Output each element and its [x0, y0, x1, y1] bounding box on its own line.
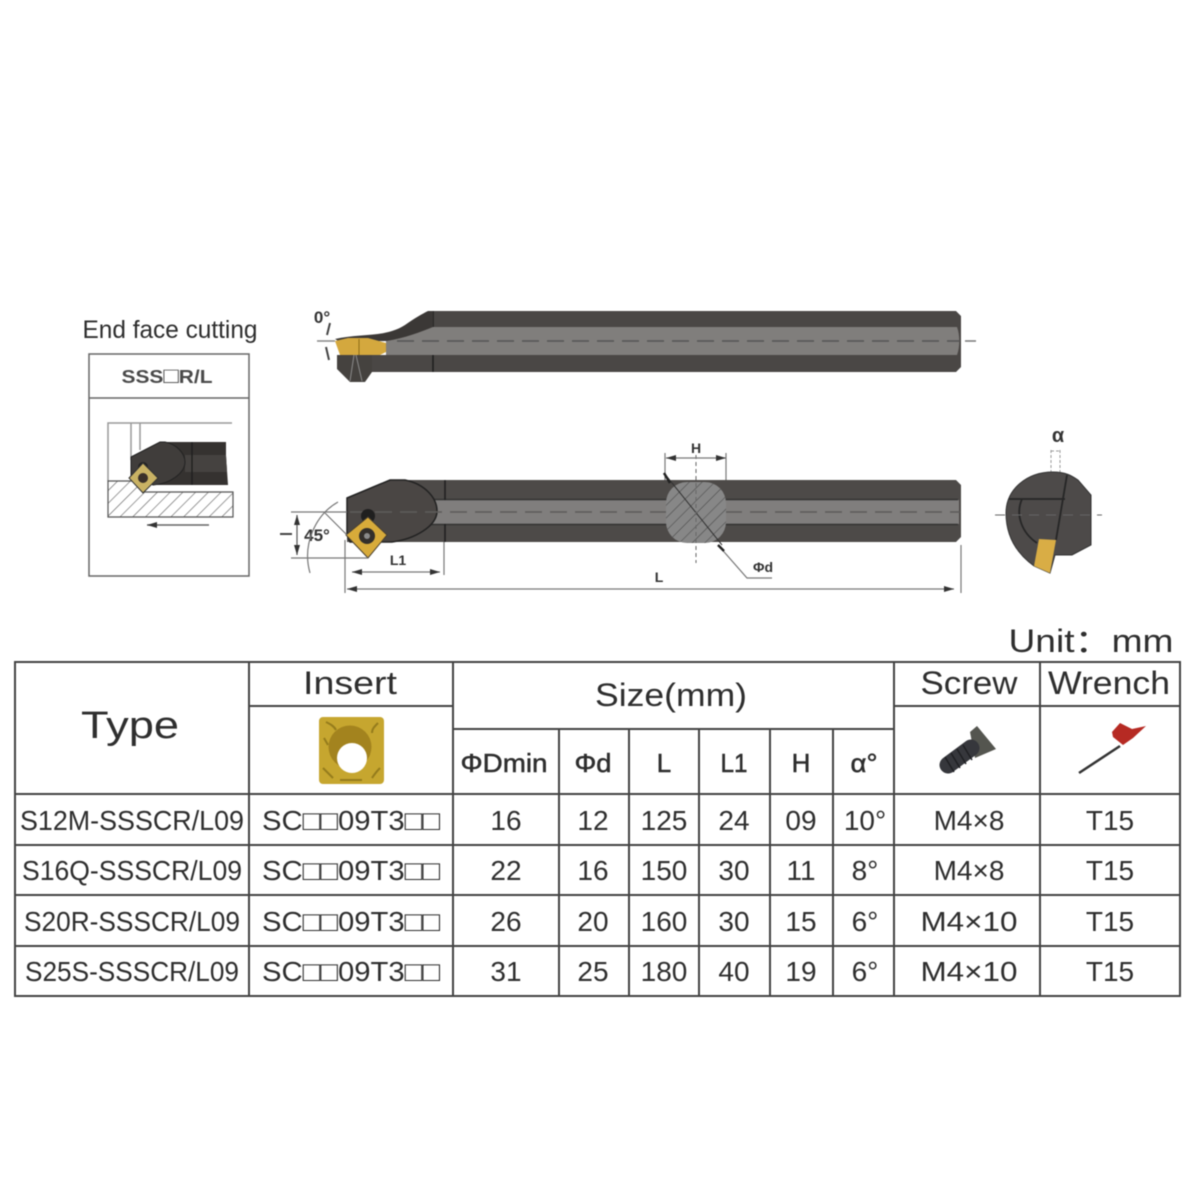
alpha label: α: [1052, 425, 1065, 447]
dimension L: [345, 540, 961, 593]
row S12M: SC□□09T3□□: [262, 805, 440, 836]
row S25S: S25S-SSSCR/L09: [25, 956, 239, 987]
angle 45 degrees: 45°: [304, 526, 330, 545]
shank divider: [444, 480, 446, 542]
body: [1006, 472, 1091, 573]
head: [347, 480, 437, 542]
center line: [350, 511, 960, 513]
row S12M: 24: [718, 805, 750, 836]
workpiece hatch: [108, 481, 233, 517]
row S20R: SC□□09T3□□: [262, 906, 440, 937]
end view drawing: [995, 425, 1102, 573]
icon: screw: [945, 726, 996, 772]
header row: [81, 665, 1170, 778]
dimension phi d: [664, 473, 773, 578]
box label: SSS □R/L: [122, 363, 212, 388]
row S20R: M4×10: [920, 906, 1018, 937]
header row: Size(mm): [595, 677, 747, 713]
row S25S: 40: [718, 956, 750, 987]
row S12M: M4×8: [934, 805, 1004, 836]
box frame: [89, 354, 249, 576]
tool side view: [131, 442, 228, 485]
center line end: [995, 514, 1102, 516]
feed arrow: [147, 524, 209, 526]
top tool drawing: [314, 308, 976, 382]
row S12M: 125: [641, 805, 687, 836]
main tool drawing: [280, 440, 961, 593]
section hatch: [664, 455, 726, 563]
header row: Φd: [574, 748, 612, 778]
head lower: [337, 355, 372, 382]
row S25S: M4×10: [920, 956, 1018, 987]
row S16Q: 22: [490, 855, 522, 886]
shank light band: [386, 327, 959, 355]
specification table: [15, 662, 1180, 996]
dimension L1: [352, 542, 444, 575]
dimension phi d: Φd: [753, 559, 773, 575]
row S20R: T15: [1086, 906, 1134, 937]
row S12M: S12M-SSSCR/L09: [20, 805, 244, 836]
header row: Type: [81, 705, 179, 747]
dimension H: H: [691, 440, 701, 456]
row S16Q: S16Q-SSSCR/L09: [22, 855, 242, 886]
row S20R: 15: [785, 906, 817, 937]
row S25S: 31: [490, 956, 522, 987]
center line: [317, 340, 976, 342]
row S12M: 10°: [844, 805, 886, 836]
unit label: Unit：mm: [1008, 623, 1174, 659]
row S16Q: [22, 855, 1134, 886]
insert: [346, 517, 387, 558]
row S16Q: SC□□09T3□□: [262, 855, 440, 886]
row S20R: S20R-SSSCR/L09: [24, 906, 240, 937]
table grid: [15, 662, 1180, 996]
row S16Q: 11: [786, 855, 816, 886]
row S20R: 6°: [852, 906, 878, 937]
header row: α°: [850, 748, 878, 778]
header row: Screw: [920, 665, 1018, 701]
row S12M: T15: [1086, 805, 1134, 836]
light band: [430, 500, 959, 524]
row S12M: 09: [785, 805, 817, 836]
row S16Q: T15: [1086, 855, 1134, 886]
row S12M: 12: [577, 805, 609, 836]
row S25S: 19: [785, 956, 817, 987]
internal lines: [1009, 475, 1067, 543]
angle label 0 degrees: 0°: [314, 308, 330, 327]
row S25S: T15: [1086, 956, 1134, 987]
icon: insert: [319, 717, 384, 784]
clamp screw: [361, 509, 375, 523]
insert gold: [335, 338, 386, 355]
header row: Wrench: [1048, 665, 1170, 701]
dimension L: L: [655, 569, 664, 585]
insert end: [1034, 539, 1056, 573]
bore outline: [108, 423, 232, 481]
row S16Q: 8°: [852, 855, 878, 886]
row S12M: 16: [490, 805, 522, 836]
shank: [372, 311, 961, 372]
row S20R: [24, 906, 1134, 937]
neck curve: [335, 311, 433, 342]
shank: [347, 480, 961, 542]
row S25S: 25: [577, 956, 609, 987]
row S20R: 160: [641, 906, 687, 937]
insert small: [129, 463, 158, 493]
dimension L1: L1: [390, 552, 406, 568]
heading: end face cutting: End face cutting: [82, 316, 258, 344]
header row: L1: [720, 748, 748, 778]
row S16Q: 16: [577, 855, 609, 886]
dimension H: [665, 440, 726, 480]
header row: H: [792, 748, 810, 778]
row S20R: 20: [577, 906, 609, 937]
header row: ΦDmin: [460, 748, 548, 778]
row S16Q: 30: [718, 855, 750, 886]
header row: L: [657, 748, 671, 778]
row S25S: 180: [641, 956, 687, 987]
row S16Q: M4×8: [934, 855, 1004, 886]
shank divider: [432, 311, 434, 372]
row S16Q: 150: [641, 855, 687, 886]
row S25S: 6°: [852, 956, 878, 987]
header row: Insert: [303, 665, 397, 701]
row S20R: 30: [718, 906, 750, 937]
angle 45 degrees: [280, 502, 368, 573]
row S25S: SC□□09T3□□: [262, 956, 440, 987]
panel: end face cutting: [82, 316, 258, 576]
row S25S: [25, 956, 1134, 987]
row S12M: [20, 805, 1134, 836]
row S20R: 26: [490, 906, 522, 937]
icon: wrench: [1079, 723, 1146, 773]
